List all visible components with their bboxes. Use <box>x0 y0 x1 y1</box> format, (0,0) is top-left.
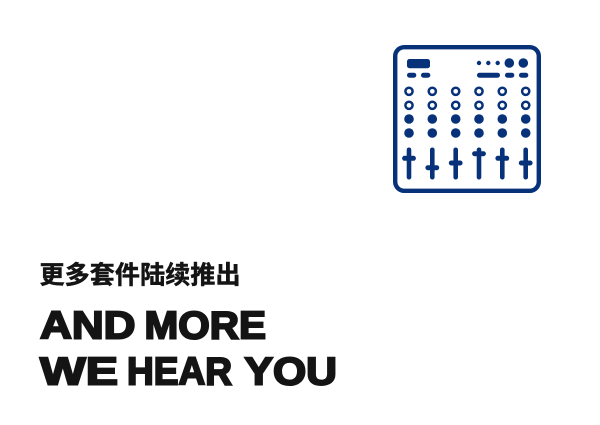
heading line 2 <box>40 350 337 393</box>
mixer filled knobs <box>404 114 530 138</box>
heading line 1 <box>40 304 266 347</box>
mixer top controls <box>407 58 528 78</box>
heading line 1: MORE <box>144 304 266 347</box>
heading <box>40 304 337 393</box>
icon: audio mixer <box>395 47 539 191</box>
mixer faders <box>402 148 533 180</box>
heading line 2: WE <box>40 350 118 393</box>
heading line 2: YOU <box>244 350 337 393</box>
mixer outline <box>395 47 539 191</box>
heading line 1: AND <box>40 304 136 347</box>
subtitle: 更多套件陆续推出 <box>40 262 240 290</box>
heading line 2: HEAR <box>127 350 232 393</box>
mixer open knobs <box>405 88 529 109</box>
